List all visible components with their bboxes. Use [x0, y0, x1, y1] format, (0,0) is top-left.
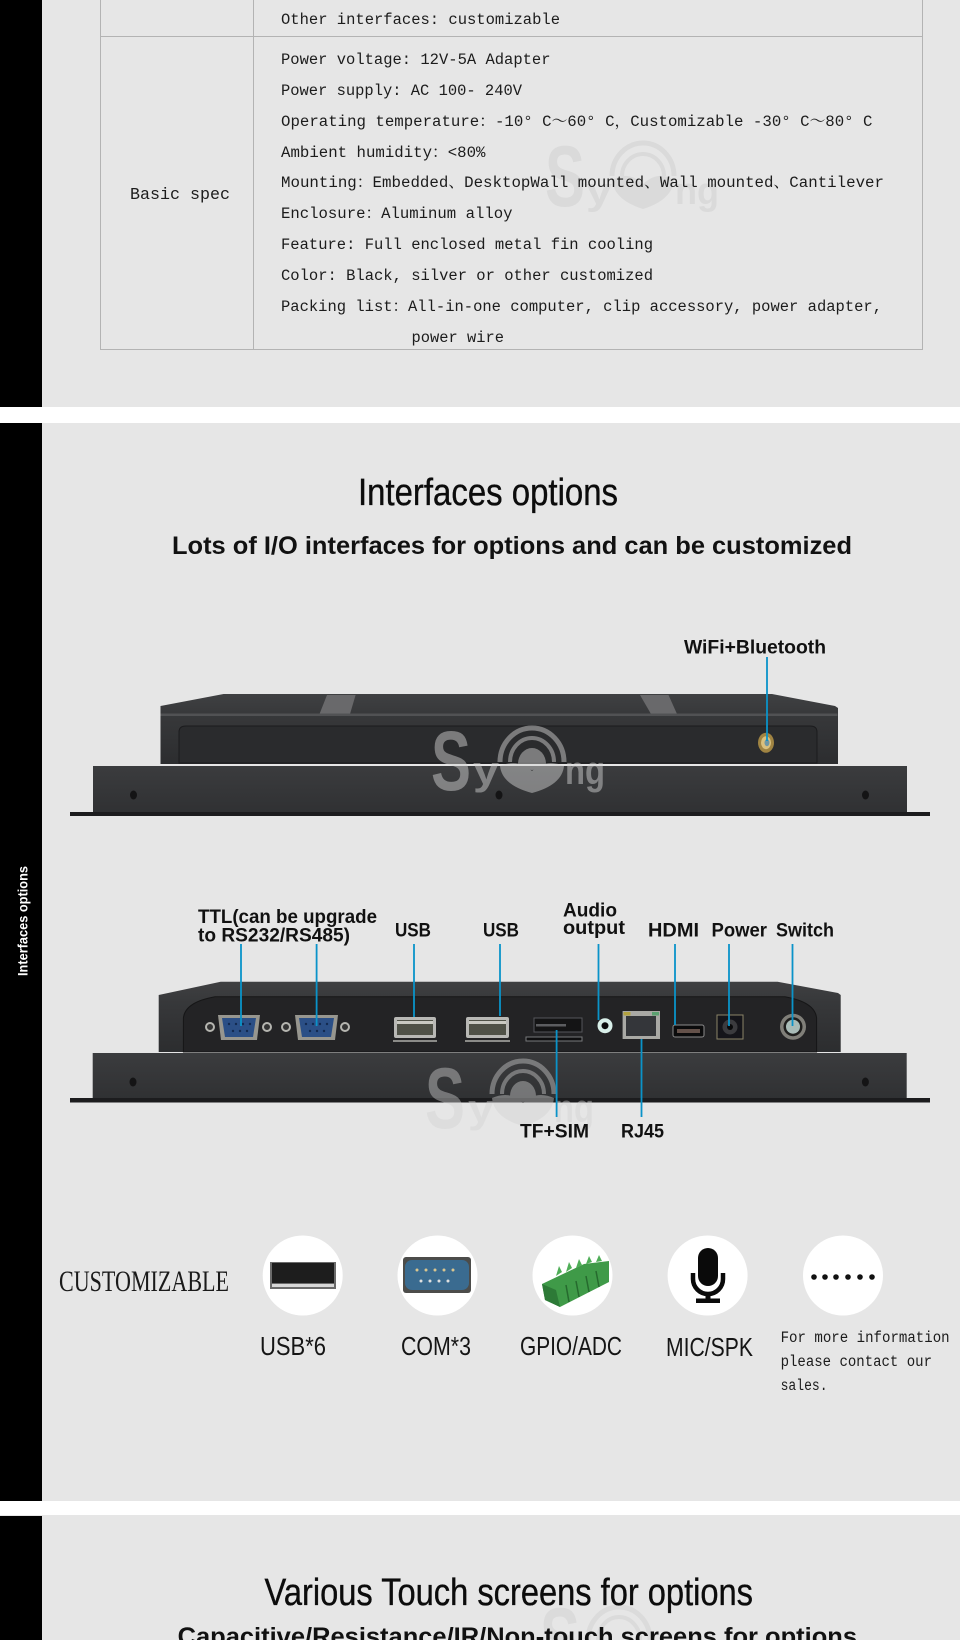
table text: basic spec list: Power supply: AC 100- 240V	[281, 82, 523, 100]
port labels: Power	[712, 920, 768, 942]
note: contact sales: sales.	[781, 1377, 828, 1395]
watermark: device logo: S	[431, 714, 471, 808]
table text: basic spec list: Feature: Full enclosed metal fin cooling	[281, 236, 653, 254]
note: contact sales: please contact our	[781, 1353, 932, 1371]
port labels: output	[563, 918, 626, 939]
port labels: to RS232/RS485)	[198, 926, 350, 946]
note: contact sales	[781, 1329, 950, 1395]
port: RJ45	[623, 1011, 660, 1039]
port: USB 1	[393, 1017, 437, 1042]
port labels: USB	[483, 920, 519, 942]
watermark: device logo: y	[473, 749, 500, 793]
panel: interfaces options section	[0, 423, 960, 1501]
sidebar: black strip with vertical label: Interfaces options	[16, 866, 30, 976]
port labels: Audio	[563, 900, 617, 922]
watermark: device logo	[425, 1051, 594, 1147]
watermark: table logo	[545, 129, 719, 225]
watermark: device logo: ng	[554, 1087, 594, 1131]
watermark: device logo: ng	[565, 749, 605, 793]
callout line: WiFi+Bluetooth	[766, 657, 768, 741]
device recessed panel	[183, 997, 817, 1052]
option labels: GPIO/ADC	[520, 1331, 622, 1361]
icon: more dots	[803, 1236, 883, 1316]
table text: basic spec list: Operating temperature：-10° C～60° C，Customizable -30° C～80° C	[281, 113, 872, 131]
option labels: USB*6	[260, 1331, 326, 1361]
table text: basic spec list: Mounting：Embedded、DesktopWall mounted、Wall mounted、Cantilever	[281, 174, 884, 192]
port labels: RJ45	[621, 1122, 664, 1142]
table text: basic spec list: Color: Black, silver or other customized	[281, 267, 653, 285]
row: customizable options	[59, 1236, 950, 1395]
watermark: device logo	[431, 714, 605, 808]
table text: basic spec list: power wire	[412, 329, 504, 347]
device recessed panel	[179, 726, 817, 763]
port labels: Switch	[776, 920, 834, 942]
sidebar: black strip with vertical label	[0, 423, 42, 1501]
device base	[93, 1053, 907, 1098]
panel: touch screens section	[0, 1515, 960, 1640]
base screws	[130, 1078, 869, 1086]
port labels: TF+SIM	[520, 1122, 589, 1142]
table text: basic spec list	[281, 51, 884, 347]
watermark: table logo: S	[545, 129, 585, 225]
device: top side view	[70, 638, 930, 816]
option labels: MIC/SPK	[666, 1332, 754, 1362]
device flange	[70, 812, 930, 816]
table text: basic spec list: Ambient humidity：<80%	[281, 144, 486, 162]
heading: Interfaces options: Interfaces options	[358, 472, 618, 514]
label: WiFi+Bluetooth: WiFi+Bluetooth	[684, 638, 826, 658]
table text: basic spec list: Power voltage: 12V-5A Adapter	[281, 51, 550, 69]
watermark: section logo	[540, 1591, 650, 1640]
port: audio jack	[598, 1018, 612, 1033]
heading: Various Touch screens: Various Touch screens for options	[264, 1572, 753, 1614]
icon: COM port	[398, 1236, 478, 1316]
port: serial connector 2	[282, 1015, 349, 1040]
port: power switch	[780, 1014, 806, 1040]
option labels	[260, 1331, 754, 1362]
option labels: COM*3	[401, 1331, 471, 1361]
base screws	[130, 790, 869, 800]
port: serial connector 1	[206, 1015, 271, 1040]
watermark: device logo: S	[425, 1051, 465, 1147]
watermark: table logo: ng	[675, 171, 719, 213]
icon: USB port	[263, 1236, 343, 1316]
panel: basic spec table section	[0, 0, 960, 407]
device upper housing	[160, 694, 838, 764]
table grid	[100, 0, 923, 350]
sidebar: black strip	[0, 1516, 42, 1640]
port: USB 2	[465, 1017, 510, 1042]
watermark: table logo: y	[586, 171, 612, 213]
subheading: I/O interfaces: Lots of I/O interfaces for options and can be customized	[172, 532, 852, 560]
port labels	[198, 900, 834, 1142]
table text: basic spec list: Enclosure：Aluminum alloy	[281, 205, 512, 223]
device: port side view	[70, 900, 930, 1147]
port: power jack	[717, 1015, 743, 1039]
icon: GPIO terminal block	[532, 1236, 612, 1316]
label: CUSTOMIZABLE: CUSTOMIZABLE	[59, 1265, 229, 1298]
table text: other interfaces: Other interfaces: customizable	[281, 11, 560, 29]
port labels: USB	[395, 920, 431, 942]
callout lines	[241, 944, 792, 1117]
watermark: device logo: y	[468, 1087, 495, 1131]
device upper housing	[159, 982, 841, 1052]
device base	[93, 766, 907, 812]
device flange	[70, 1098, 930, 1102]
housing highlight strips	[160, 695, 838, 716]
icon: microphone	[668, 1236, 748, 1316]
table row label: Basic spec: Basic spec	[130, 186, 230, 205]
port labels: TTL(can be upgrade	[198, 907, 377, 928]
sidebar: black strip	[0, 0, 42, 407]
port labels: HDMI	[648, 920, 699, 942]
table text: basic spec list: Packing list：All-in-one computer, clip accessory, power adapter,	[281, 298, 882, 316]
antenna connector	[758, 733, 774, 753]
port: HDMI	[673, 1025, 704, 1037]
port: TF+SIM slots	[526, 1018, 582, 1041]
